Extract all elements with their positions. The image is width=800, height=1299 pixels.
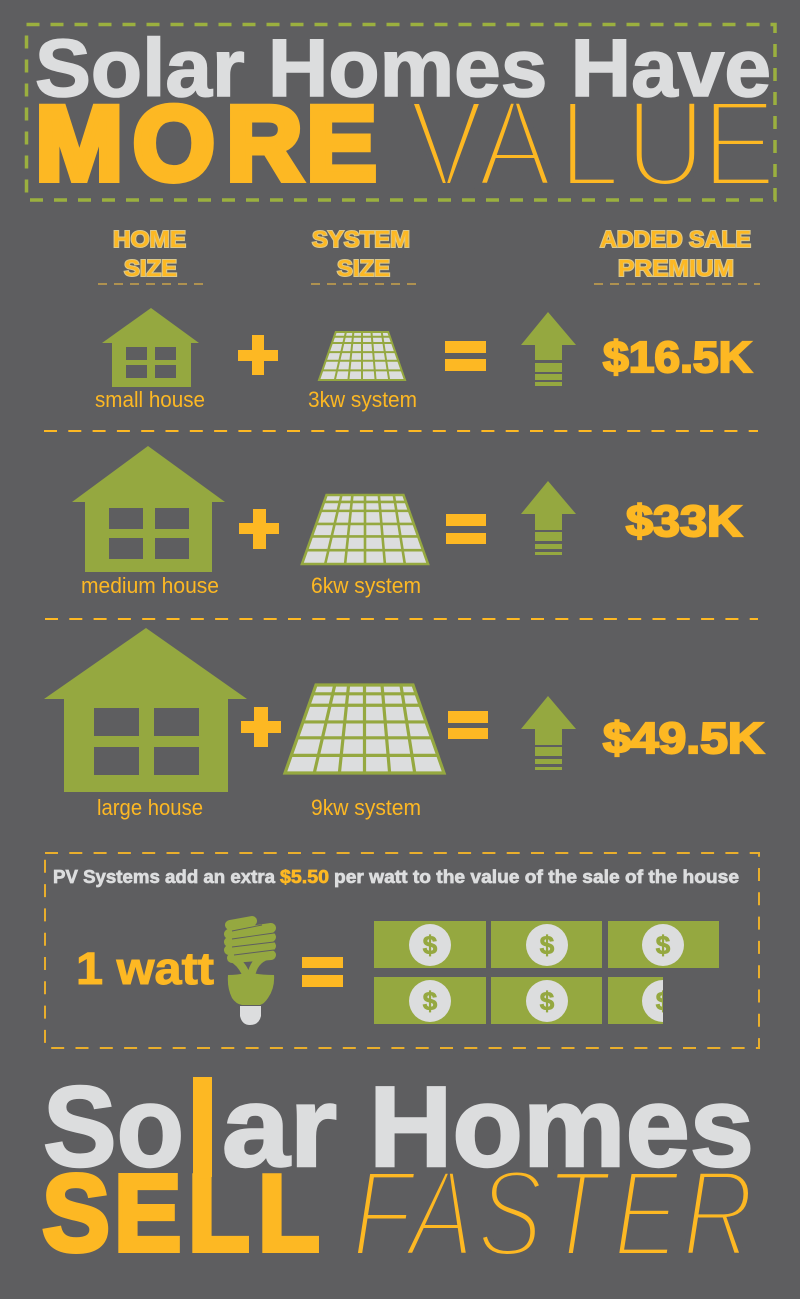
bill 2: $ [540, 930, 555, 960]
closing headline [42, 1064, 754, 1283]
icon: up arrow [521, 312, 576, 386]
per-watt statement: per watt to the value of the sale of the house [334, 866, 739, 887]
bill 5: $ [540, 986, 555, 1016]
1 watt label: 1 watt [76, 943, 214, 994]
column headings [98, 226, 760, 284]
per-watt statement: $5.50 [280, 866, 329, 887]
panel: per-watt value [45, 853, 759, 1048]
icon: equals [448, 711, 488, 739]
icon: equals [446, 514, 486, 544]
partial bill 6 [608, 977, 663, 1024]
icon: small house [102, 308, 199, 387]
row: large house [44, 628, 764, 820]
icon: large house [44, 628, 247, 792]
icon: medium house [72, 446, 225, 572]
bill 4 [374, 977, 486, 1024]
bill 4: $ [423, 986, 438, 1016]
row: small house [95, 308, 752, 412]
value: $33K: $33K [626, 497, 742, 546]
row: medium house [72, 446, 742, 598]
divider 1 [44, 430, 758, 432]
icon: equals [302, 957, 343, 987]
closing headline: So [43, 1064, 184, 1191]
title frame [26, 24, 775, 200]
icon: up arrow [521, 696, 576, 770]
label: 6kw system: 6kw system [311, 573, 421, 598]
column headings: HOME [113, 226, 186, 252]
per-watt statement [53, 866, 739, 887]
title: Solar Homes Have [35, 23, 771, 114]
icon: 6kw solar panel [302, 495, 428, 564]
title: VALUE [410, 75, 776, 212]
title: MORE [36, 86, 377, 202]
money bills [374, 921, 719, 1024]
bill 5 [491, 977, 602, 1024]
label: small house: small house [95, 387, 205, 412]
column headings: PREMIUM [618, 255, 734, 281]
icon: up arrow [521, 481, 576, 555]
column headings: SIZE [124, 255, 177, 281]
closing headline: FASTER [352, 1144, 753, 1283]
bill 3 [608, 921, 719, 968]
icon: light bulb [228, 921, 274, 1025]
closing headline: ar [222, 1064, 337, 1191]
value: $16.5K: $16.5K [603, 333, 752, 382]
icon: plus [241, 707, 281, 747]
column headings: ADDED SALE [600, 226, 751, 252]
column headings: SYSTEM [312, 226, 410, 252]
closing headline: Homes [369, 1064, 754, 1191]
closing headline: SELL [42, 1153, 320, 1274]
label: large house: large house [97, 795, 203, 820]
bill 1: $ [423, 930, 438, 960]
icon: plus [238, 335, 278, 375]
bill 2 [491, 921, 602, 968]
label: 3kw system: 3kw system [308, 387, 417, 412]
icon: 3kw solar panel [319, 332, 405, 380]
icon: equals [445, 341, 486, 371]
value: $49.5K: $49.5K [603, 714, 764, 763]
column headings: SIZE [337, 255, 390, 281]
title [35, 23, 776, 212]
partial bill 6: $ [656, 986, 671, 1016]
icon: plus [239, 509, 279, 549]
label: medium house: medium house [81, 573, 219, 598]
bill 3: $ [656, 930, 671, 960]
bill 1 [374, 921, 486, 968]
label: 9kw system: 9kw system [311, 795, 421, 820]
icon: 9kw solar panel [285, 685, 444, 773]
divider 2 [45, 618, 758, 620]
per-watt statement: PV Systems add an extra [53, 866, 276, 887]
